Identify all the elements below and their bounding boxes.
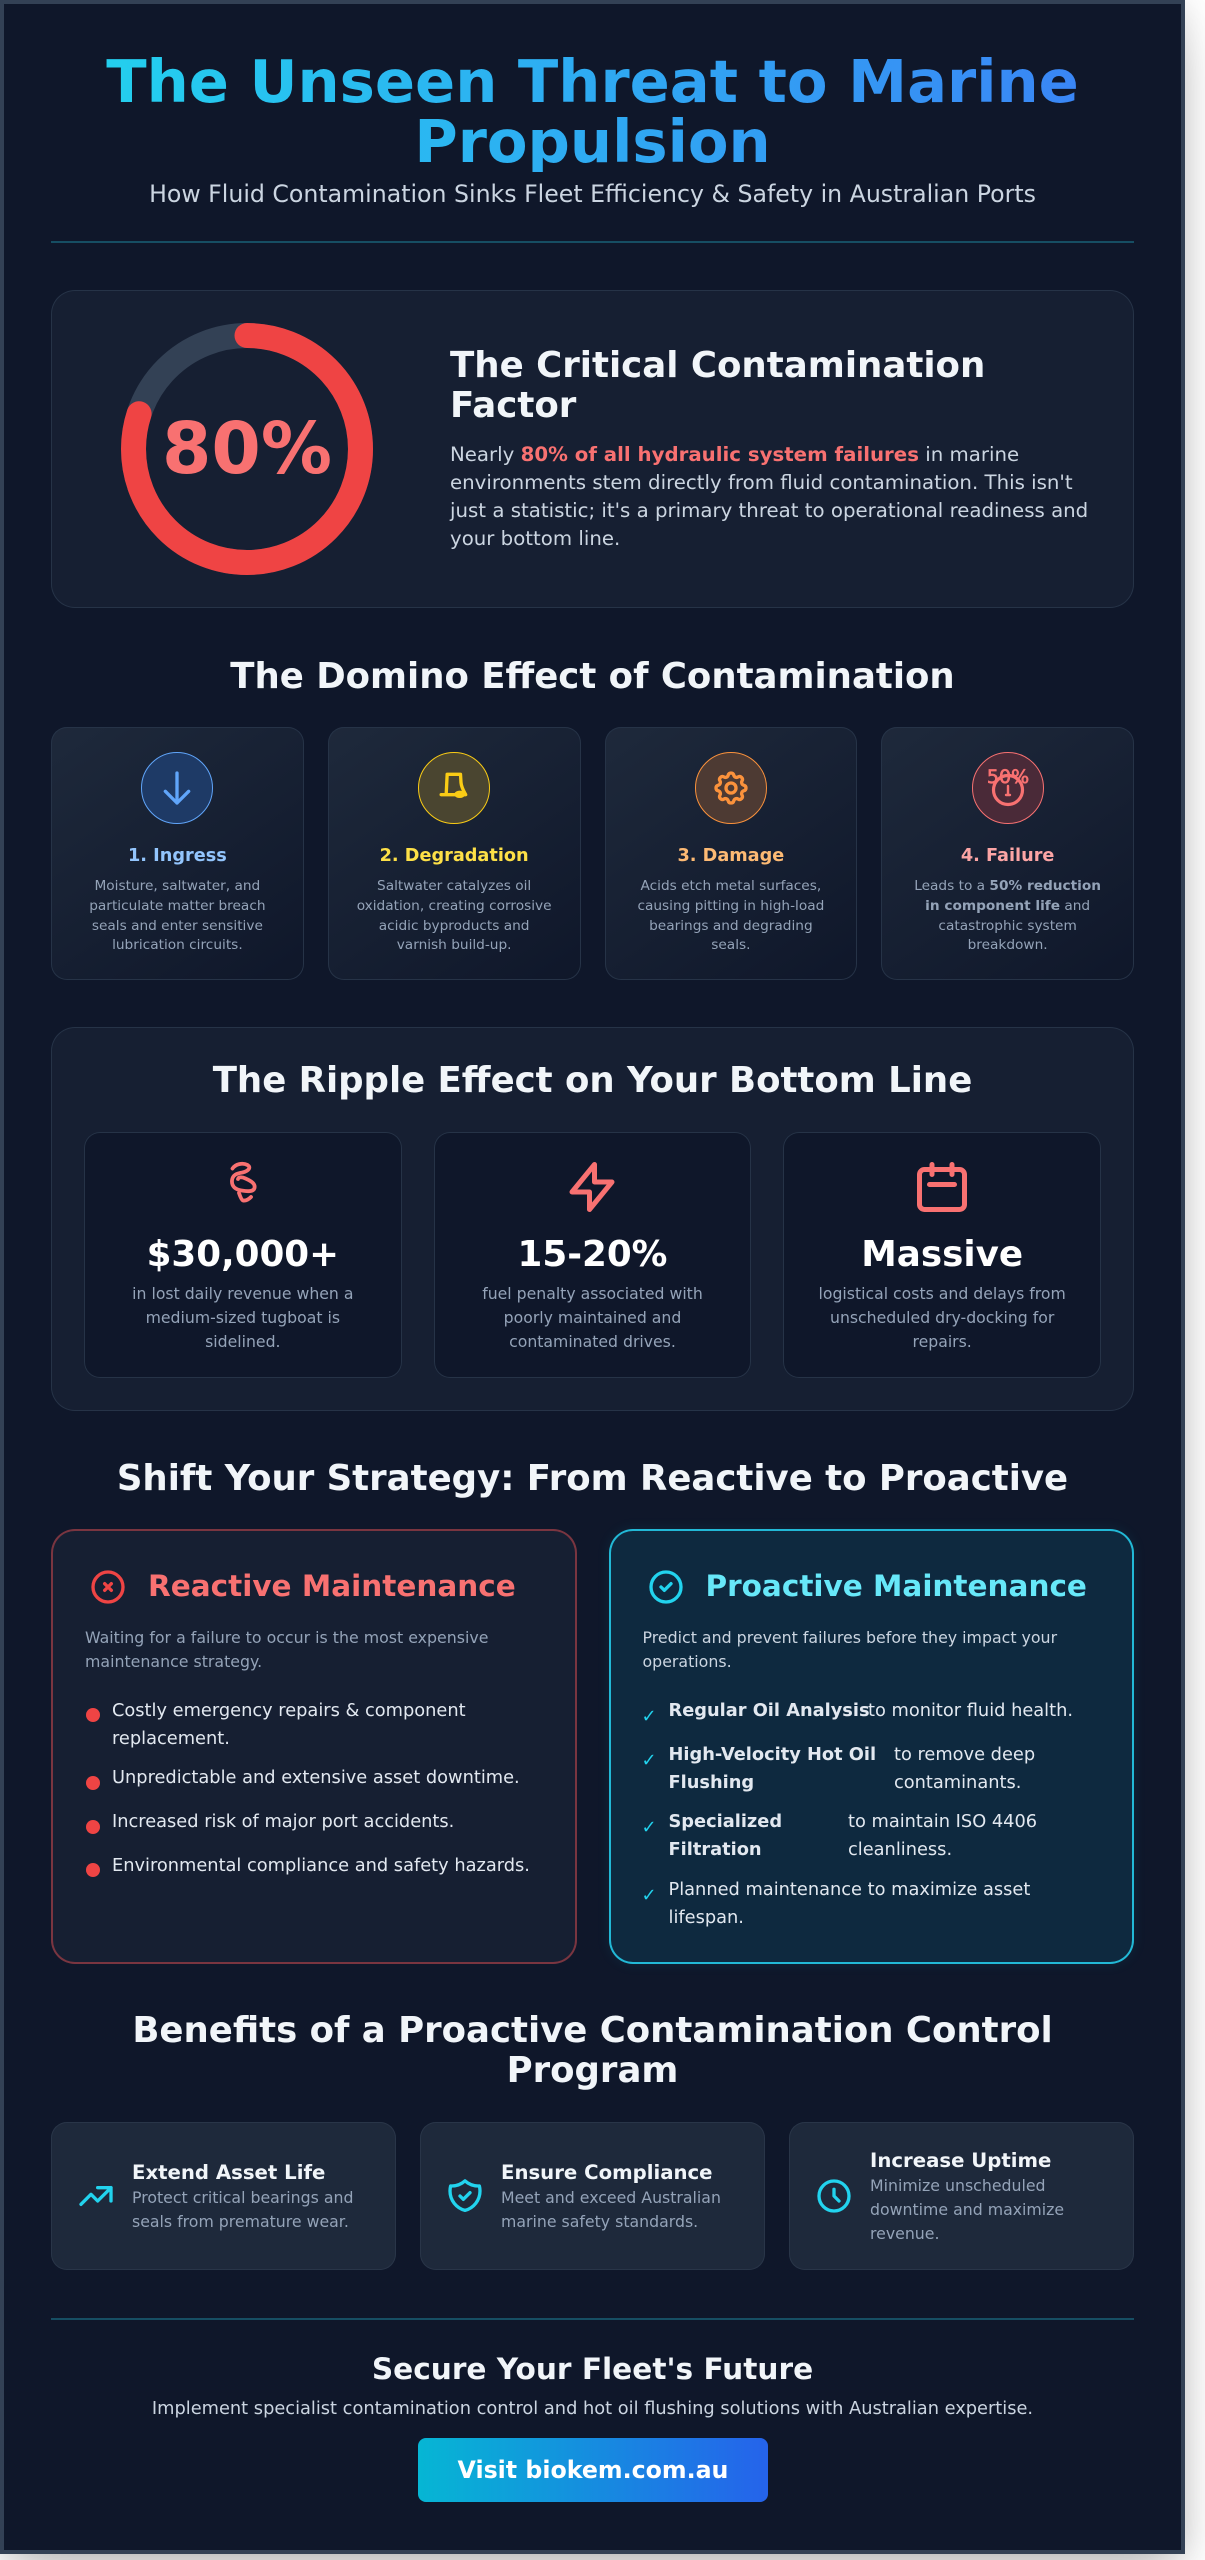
icon: clock: [817, 2179, 851, 2213]
benefit text: Meet and exceed Australian: [501, 2188, 721, 2207]
reactive list: Unpredictable and extensive asset downtime.: [112, 1766, 520, 1788]
stat value: Massive: [861, 1234, 1023, 1275]
heading: benefits: Benefits of a Proactive Contamination Control: [132, 2010, 1053, 2051]
benefit text: Protect critical bearings and: [132, 2188, 353, 2207]
card title: 2. Degradation: [380, 846, 529, 866]
icon: check circle: [649, 1570, 683, 1604]
heading: critical factor: [450, 345, 985, 426]
icon: gauge with 50%: 50%: [987, 766, 1029, 788]
reactive intro: Waiting for a failure to occur is the most expensive: [85, 1628, 488, 1646]
heading: strategy shift: Shift Your Strategy: From Reactive to Proactive: [117, 1458, 1068, 1499]
stat text: [482, 1284, 703, 1351]
proactive list: Specialized: [668, 1810, 782, 1832]
heading: critical factor: The Critical Contamination: [450, 345, 985, 386]
icon: calendar: [917, 1162, 967, 1212]
reactive intro: [85, 1628, 488, 1670]
card text: in component life and: [925, 898, 1090, 914]
card text: Leads to a 50% reduction: [914, 878, 1101, 894]
proactive list: Planned maintenance to maximize asset: [668, 1878, 1030, 1900]
stat text: contaminated drives.: [509, 1332, 676, 1351]
icon: x circle: [91, 1570, 125, 1604]
stat value: $30,000+: [147, 1234, 339, 1275]
benefit text: revenue.: [870, 2224, 940, 2242]
icon: trending up: [79, 2186, 113, 2206]
heading: benefits: [132, 2010, 1053, 2091]
card text: varnish build-up.: [397, 937, 512, 953]
proactive list: ✓: [642, 1750, 657, 1771]
heading: benefits: Program: [507, 2050, 678, 2091]
stat text: poorly maintained and: [504, 1308, 681, 1327]
card text: oxidation, creating corrosive: [357, 898, 552, 914]
benefit text: [132, 2188, 353, 2231]
card title: 1. Ingress: [128, 846, 227, 866]
stat text: [819, 1284, 1066, 1351]
card: failure: [881, 727, 1134, 980]
proactive list: [642, 1700, 1073, 1928]
icon: dollar glyph: [230, 1162, 257, 1202]
card text: [637, 878, 824, 953]
card: degradation: [328, 727, 580, 980]
benefit card: increase uptime: [789, 2122, 1134, 2270]
donut value: 80%: [162, 407, 332, 490]
heading: call to action: Secure Your Fleet's Future: [372, 2352, 813, 2386]
benefit text: [501, 2188, 721, 2231]
proactive list: Filtration: [668, 1838, 762, 1860]
icon: lightning: [570, 1162, 614, 1212]
card text: seals and enter sensitive: [92, 918, 263, 934]
text: critical factor: your bottom line.: [450, 527, 620, 550]
card text: [89, 878, 266, 953]
card: damage: [604, 727, 857, 980]
proactive list: cleanliness.: [848, 1838, 952, 1860]
proactive list: High-Velocity Hot Oil: [668, 1744, 876, 1764]
title: Propulsion: [414, 106, 771, 176]
icon: gear: [695, 752, 767, 824]
stat text: medium-sized tugboat is: [146, 1308, 340, 1327]
card text: bearings and degrading: [649, 918, 813, 934]
card text: particulate matter breach: [89, 898, 266, 914]
proactive intro: [642, 1628, 1058, 1670]
stat value: 15-20%: [518, 1234, 667, 1275]
benefit text: seals from premature wear.: [132, 2212, 349, 2231]
stat card: lost revenue: [84, 1132, 402, 1378]
card text: Moisture, saltwater, and: [94, 878, 260, 894]
text: critical factor: Nearly 80% of all hydraulic system failures in marine: [450, 443, 1019, 466]
card title: 4. Failure: [961, 846, 1054, 866]
stat text: fuel penalty associated with: [482, 1284, 703, 1303]
stat text: [132, 1284, 353, 1351]
proactive list: lifespan.: [668, 1906, 744, 1928]
panel: reactive maintenance: [51, 1529, 576, 1964]
heading: critical factor: Factor: [450, 385, 576, 426]
card text: Acids etch metal surfaces,: [641, 878, 821, 894]
proactive title: Proactive Maintenance: [706, 1569, 1087, 1603]
card: ingress: [51, 727, 304, 980]
card text: catastrophic system: [938, 918, 1077, 934]
card text: acidic byproducts and: [379, 918, 530, 934]
card text: Saltwater catalyzes oil: [377, 878, 531, 894]
stat text: logistical costs and delays from: [819, 1284, 1066, 1303]
benefit title: Ensure Compliance: [501, 2160, 713, 2184]
reactive title: Reactive Maintenance: [148, 1569, 516, 1603]
button: visit website: [418, 2438, 768, 2502]
proactive list: Flushing: [668, 1772, 754, 1792]
text: critical factor: [450, 443, 1088, 550]
icon: flask bell: [418, 752, 490, 824]
benefit title: Increase Uptime: [870, 2149, 1051, 2172]
heading: domino effect: The Domino Effect of Contamination: [230, 656, 955, 697]
stat text: in lost daily revenue when a: [132, 1284, 353, 1303]
reactive list: Environmental compliance and safety hazards.: [112, 1854, 530, 1876]
panel: proactive maintenance: [608, 1529, 1134, 1964]
icon: shield check: [448, 2179, 482, 2212]
proactive list: ✓: [642, 1885, 657, 1906]
proactive list: to remove deep: [894, 1744, 1035, 1764]
subtitle: How Fluid Contamination Sinks Fleet Efficiency & Safety in Australian Ports: [149, 180, 1036, 208]
text: call to action: Implement specialist contamination control and hot oil flushing solutions with Australian expertise.: [152, 2398, 1033, 2418]
proactive list: ✓: [642, 1817, 657, 1838]
donut chart: 80%: [121, 323, 373, 575]
stat text: repairs.: [912, 1332, 972, 1351]
panel: critical contamination factor: [51, 290, 1134, 608]
card text: [914, 878, 1101, 953]
proactive list: Regular Oil Analysis: [668, 1700, 870, 1721]
title: [51, 52, 1134, 172]
panel: ripple effect: [51, 1027, 1134, 1411]
icon: gauge with 50%: [972, 752, 1044, 824]
stat card: fuel penalty: [434, 1132, 751, 1378]
card text: breakdown.: [968, 937, 1048, 953]
card text: causing pitting in high-load: [637, 898, 824, 914]
stat text: sidelined.: [205, 1332, 281, 1351]
proactive list: to maintain ISO 4406: [848, 1810, 1037, 1832]
proactive list: to monitor fluid health.: [868, 1700, 1073, 1721]
reactive list: Increased risk of major port accidents.: [112, 1810, 454, 1832]
text: critical factor: environments stem directly from fluid contamination. This isn't: [450, 471, 1073, 494]
title: The Unseen Threat to Marine: [106, 46, 1079, 116]
card text: lubrication circuits.: [112, 937, 243, 953]
icon: arrow down: [141, 752, 213, 824]
card text: seals.: [711, 937, 750, 953]
stat card: logistical costs: [783, 1132, 1101, 1378]
proactive intro: operations.: [642, 1652, 732, 1670]
stat text: unscheduled dry-docking for: [830, 1308, 1054, 1327]
heading: ripple effect: The Ripple Effect on Your Bottom Line: [213, 1060, 972, 1100]
benefit text: downtime and maximize: [870, 2200, 1064, 2218]
proactive list: contaminants.: [894, 1772, 1021, 1792]
reactive list: Costly emergency repairs & component: [112, 1700, 466, 1721]
button: visit website: Visit biokem.com.au: [458, 2456, 728, 2484]
benefit text: marine safety standards.: [501, 2212, 698, 2231]
reactive list: [86, 1700, 530, 1877]
text: critical factor: just a statistic; it's a primary threat to operational readiness and: [450, 499, 1088, 522]
benefit text: [870, 2176, 1064, 2242]
benefit title: Extend Asset Life: [132, 2160, 325, 2184]
benefit card: extend asset life: [51, 2122, 396, 2270]
reactive list: replacement.: [112, 1728, 230, 1749]
proactive list: ✓: [642, 1706, 657, 1727]
card text: [357, 878, 552, 953]
reactive intro: maintenance strategy.: [85, 1652, 262, 1670]
card title: 3. Damage: [677, 846, 784, 866]
benefit text: Minimize unscheduled: [870, 2176, 1046, 2194]
proactive intro: Predict and prevent failures before they impact your: [642, 1628, 1057, 1646]
benefit card: ensure compliance: [420, 2122, 765, 2270]
